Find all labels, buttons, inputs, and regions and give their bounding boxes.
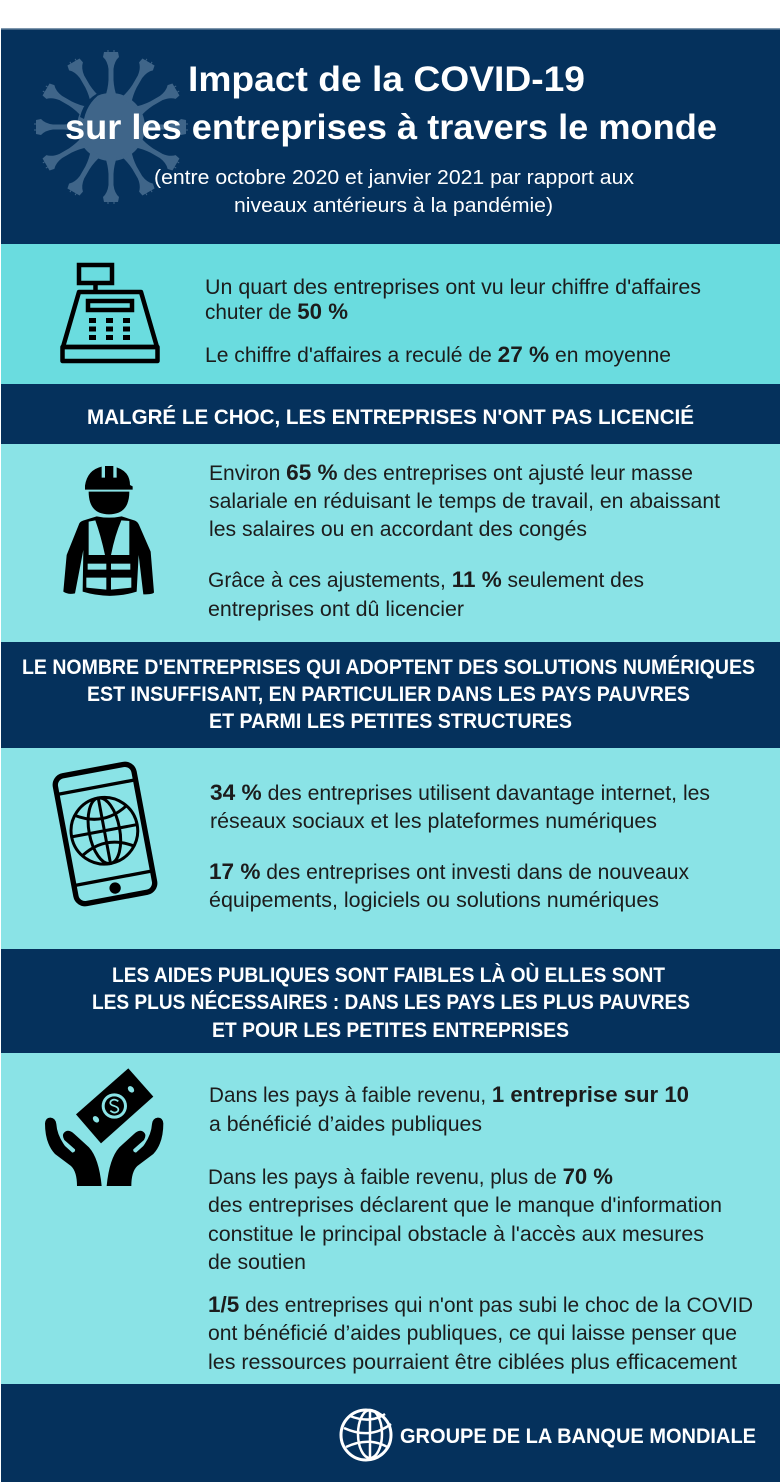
heading: digital adoption: [1, 642, 780, 748]
title: Impact de la COVID-19: [188, 60, 585, 99]
heading: public support: [1, 949, 780, 1053]
heading: layoffs: MALGRÉ LE CHOC, LES ENTREPRISES N'ONT PAS LICENCIÉ: [87, 406, 694, 429]
heading: digital adoption: EST INSUFFISANT, EN PARTICULIER DANS LES PAYS PAUVRES: [87, 683, 690, 706]
heading: public support: LES PLUS NÉCESSAIRES : DANS LES PAYS LES PLUS PAUVRES: [92, 991, 690, 1014]
text: employment facts: [208, 460, 720, 621]
heading: digital adoption: ET PARMI LES PETITES STRUCTURES: [209, 710, 572, 733]
text: public aid facts: a bénéficié d’aides publiques: [209, 1113, 482, 1136]
text: public aid facts: ont bénéficié d’aides publiques, ce qui laisse penser que: [208, 1322, 737, 1345]
text: digital facts: réseaux sociaux et les plateformes numériques: [210, 810, 657, 833]
text: employment facts: les salaires ou en accordant des congés: [209, 518, 587, 541]
text: digital facts: 34 % des entreprises utilisent davantage internet, les: [210, 780, 710, 805]
heading: public support: LES AIDES PUBLIQUES SONT FAIBLES LÀ OÙ ELLES SONT: [112, 963, 665, 987]
subtitle: (entre octobre 2020 et janvier 2021 par rapport aux: [154, 167, 634, 189]
panel: digital: [1, 748, 780, 949]
text: public aid facts: Dans les pays à faible revenu, 1 entreprise sur 10: [209, 1082, 689, 1107]
icon: hands with banknote: [45, 1068, 163, 1186]
text: World Bank Group: GROUPE DE LA BANQUE MONDIALE: [400, 1425, 756, 1448]
text: employment facts: entreprises ont dû licencier: [208, 598, 464, 621]
text: revenue facts: chuter de 50 %: [205, 299, 348, 324]
text: digital facts: 17 % des entreprises ont investi dans de nouveaux: [209, 859, 689, 884]
text: public aid facts: les ressources pourraient être ciblées plus efficacement: [208, 1351, 737, 1374]
title: [65, 60, 717, 147]
text: employment facts: Grâce à ces ajustements, 11 % seulement des: [208, 567, 644, 592]
text: digital facts: [209, 780, 710, 912]
heading: layoffs: [1, 384, 780, 444]
text: employment facts: salariale en réduisant le temps de travail, en abaissant: [209, 490, 720, 513]
text: revenue facts: Le chiffre d'affaires a reculé de 27 % en moyenne: [205, 342, 671, 367]
text: public aid facts: Dans les pays à faible revenu, plus de 70 %: [208, 1164, 613, 1189]
text: public aid facts: [208, 1082, 753, 1374]
title: sur les entreprises à travers le monde: [65, 108, 717, 147]
panel: employment: [1, 444, 780, 642]
subtitle: [154, 167, 634, 217]
text: employment facts: Environ 65 % des entreprises ont ajusté leur masse: [209, 460, 693, 485]
text: public aid facts: 1/5 des entreprises qui n'ont pas subi le choc de la COVID: [208, 1292, 753, 1317]
subtitle: niveaux antérieurs à la pandémie): [234, 195, 553, 217]
text: revenue facts: [205, 276, 701, 367]
text: public aid facts: des entreprises déclarent que le manque d'information: [208, 1194, 722, 1217]
icon: coronavirus: [34, 50, 188, 204]
panel: public aid: [1, 1053, 780, 1384]
icon: World Bank globe logo: [341, 1410, 391, 1460]
text: public aid facts: de soutien: [208, 1251, 306, 1274]
footer: [1, 1384, 780, 1482]
icon: worker: [63, 466, 154, 596]
panel: revenue: [1, 244, 780, 384]
panel: title header: [1, 28, 780, 244]
icon: smartphone with globe: [54, 763, 156, 905]
heading: public support: ET POUR LES PETITES ENTREPRISES: [212, 1019, 569, 1042]
text: public aid facts: constitue le principal obstacle à l'accès aux mesures: [208, 1223, 704, 1246]
text: revenue facts: Un quart des entreprises ont vu leur chiffre d'affaires: [205, 276, 701, 299]
icon: cash register: [62, 265, 158, 361]
text: digital facts: équipements, logiciels ou solutions numériques: [209, 889, 659, 912]
